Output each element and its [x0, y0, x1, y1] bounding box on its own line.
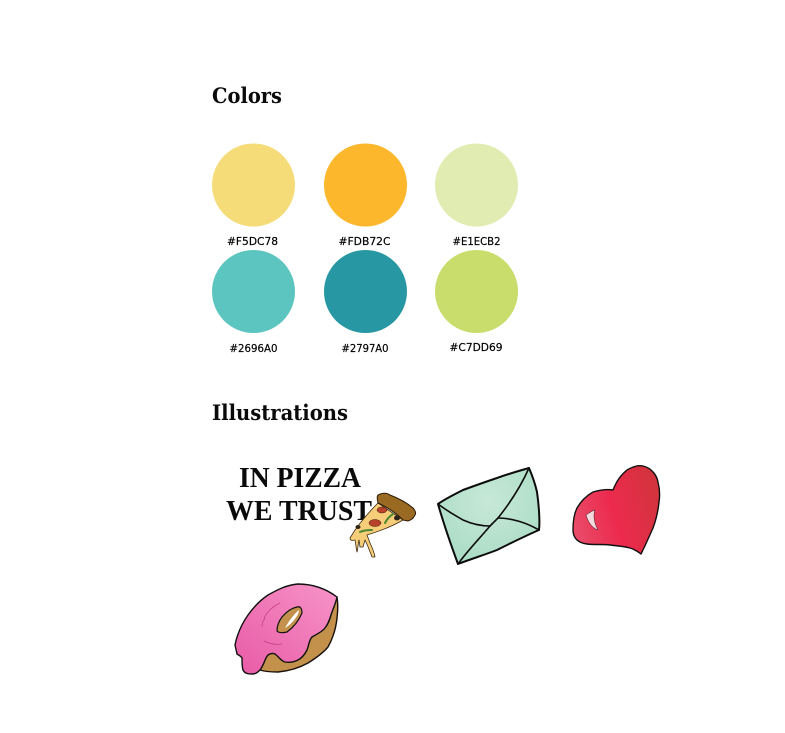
heading: Illustrations: Illustrations: [212, 400, 348, 425]
swatch: E1ECB2: #E1ECB2: [452, 235, 500, 248]
swatch: 2696A0: [212, 250, 295, 355]
illustration: In Pizza We Trust lettering: [226, 463, 372, 527]
swatch: E1ECB2: [435, 144, 518, 248]
illustration: pizza slice: [350, 493, 416, 557]
illustration: donut: [235, 584, 338, 674]
swatch: F5DC78: #F5DC78: [227, 235, 278, 248]
swatch: 2797A0: [324, 250, 407, 355]
illustration: In Pizza We Trust lettering: IN PIZZA: [239, 463, 362, 494]
illustration: envelope: [438, 468, 539, 564]
swatch: 2696A0: #2696A0: [230, 342, 278, 355]
swatch: C7DD69: #C7DD69: [450, 341, 502, 354]
swatch: F5DC78: [212, 144, 295, 248]
illustration: heart: [573, 466, 660, 554]
swatch: 2797A0: #2797A0: [342, 342, 389, 355]
swatch: FDB72C: #FDB72C: [338, 235, 391, 248]
heading: Colors: Colors: [212, 83, 282, 108]
illustration: In Pizza We Trust lettering: WE TRUST: [226, 496, 372, 527]
swatch: FDB72C: [324, 144, 407, 248]
swatch: C7DD69: [435, 250, 518, 354]
